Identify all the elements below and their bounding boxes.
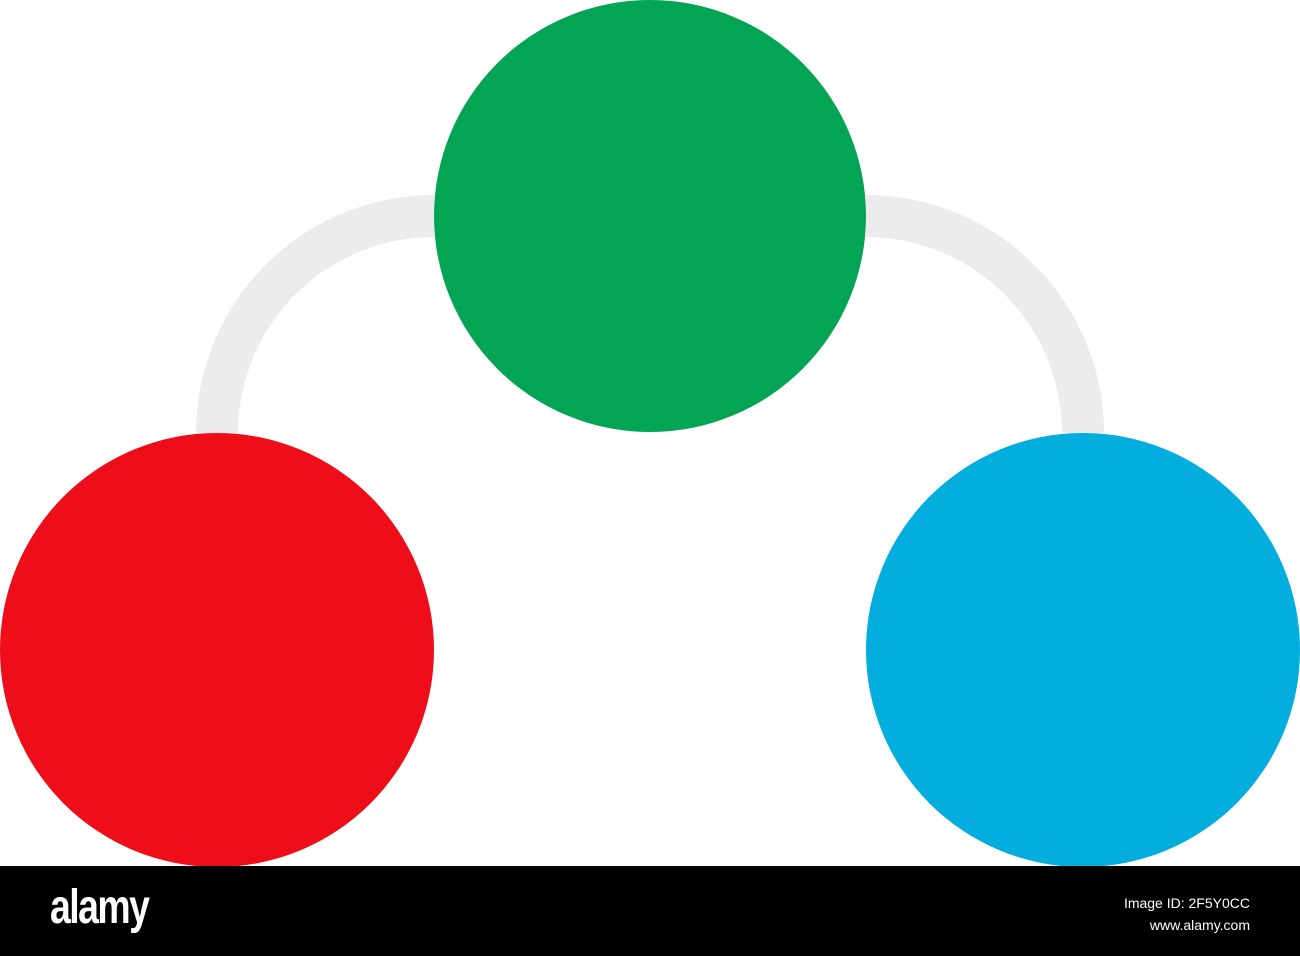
arc: right connector [866, 216, 1083, 433]
logo text: alamy [50, 881, 148, 934]
circle: blue right [866, 433, 1300, 867]
arc: left connector [217, 216, 434, 433]
circle: green top [434, 0, 866, 432]
footer bar [0, 866, 1300, 956]
image id text [1124, 895, 1250, 933]
image id text: Image ID: 2F5Y0CC [1124, 895, 1250, 911]
image id text: www.alamy.com [1150, 917, 1250, 933]
circle: red left [0, 433, 434, 867]
